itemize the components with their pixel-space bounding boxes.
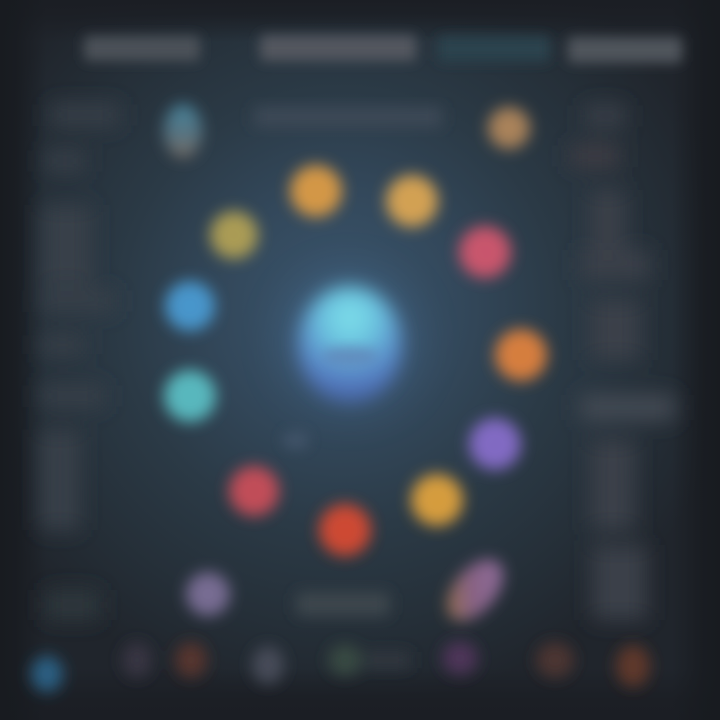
node: yellow bbox=[386, 175, 438, 227]
heading: blurred title bar bbox=[84, 35, 682, 63]
node: red-orange bbox=[319, 504, 371, 556]
legend: green with label bbox=[328, 644, 410, 676]
ring of nodes bbox=[164, 165, 547, 556]
small label under sphere bbox=[282, 430, 310, 450]
icon: lower-left lilac bbox=[186, 572, 230, 616]
legend: rust bbox=[175, 642, 207, 678]
icon: top-left blue and grey bbox=[164, 104, 202, 158]
left text column bbox=[40, 104, 120, 620]
node: deep orange bbox=[495, 329, 547, 381]
subtitle block bbox=[254, 107, 442, 127]
node: orange bbox=[290, 165, 342, 217]
sphere body bbox=[298, 286, 402, 402]
sphere lower band bbox=[322, 347, 378, 365]
node: cyan bbox=[164, 370, 216, 422]
corner icons bbox=[164, 104, 530, 631]
icon: lower-right multicolor bbox=[436, 549, 514, 631]
legend: brown bbox=[536, 642, 574, 678]
node: blue bbox=[165, 281, 215, 331]
sphere outer glow bbox=[280, 272, 420, 412]
right text column bbox=[570, 105, 675, 620]
node: amber bbox=[411, 474, 463, 526]
node: crimson bbox=[229, 466, 279, 516]
legend: burnt orange bbox=[616, 645, 650, 687]
central sphere bbox=[280, 272, 420, 412]
legend: blue bbox=[31, 656, 63, 692]
node: purple bbox=[469, 418, 521, 470]
bottom legend row bbox=[31, 641, 650, 692]
icon: top-right tan bbox=[488, 107, 530, 149]
legend: muted violet bbox=[122, 642, 152, 678]
legend: purple bbox=[442, 641, 478, 675]
node: olive bbox=[210, 211, 258, 259]
node: pink bbox=[459, 226, 511, 278]
caption block bbox=[296, 592, 390, 616]
legend: slate bbox=[252, 646, 284, 684]
